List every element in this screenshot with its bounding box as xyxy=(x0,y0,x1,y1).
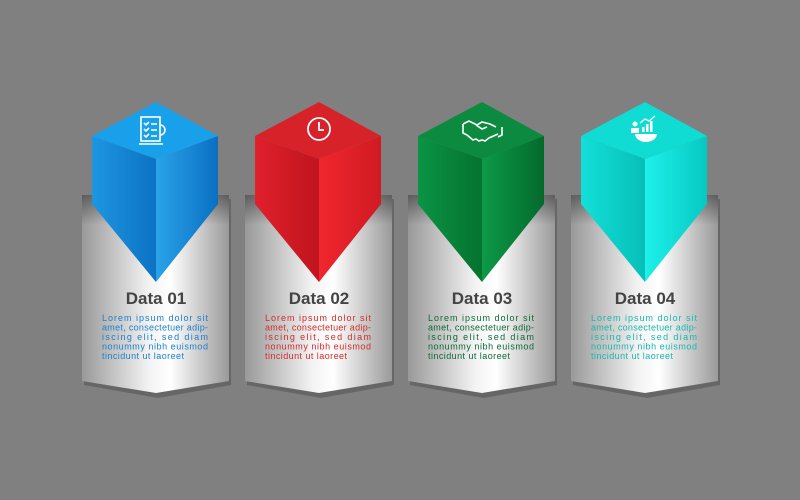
title: Data 01 xyxy=(126,289,186,308)
body text xyxy=(591,313,697,361)
body text: nonummy nibh euismod xyxy=(428,342,534,352)
body text: amet, consectetuer adip- xyxy=(428,322,534,332)
body text xyxy=(102,313,208,361)
title: Data 03 xyxy=(452,289,512,308)
hexagon prism blue xyxy=(92,102,218,282)
body text: iscing elit, sed diam xyxy=(428,332,534,342)
hexagon prism red xyxy=(255,102,381,282)
card 2: Data 02 xyxy=(245,102,394,398)
title: Data 02 xyxy=(289,289,349,308)
body text: amet, consectetuer adip- xyxy=(265,322,371,332)
body text: nonummy nibh euismod xyxy=(265,342,371,352)
body text: tincidunt ut laoreet xyxy=(265,351,347,361)
card 1: Data 01 xyxy=(82,102,231,398)
body text: tincidunt ut laoreet xyxy=(102,351,184,361)
body text: tincidunt ut laoreet xyxy=(428,351,510,361)
body text xyxy=(265,313,371,361)
body text: amet, consectetuer adip- xyxy=(102,322,208,332)
hexagon prism green xyxy=(418,102,544,282)
body text: nonummy nibh euismod xyxy=(102,342,208,352)
body text: iscing elit, sed diam xyxy=(591,332,697,342)
body text: nonummy nibh euismod xyxy=(591,342,697,352)
icon: handshake xyxy=(463,121,502,141)
card 4: Data 04 xyxy=(571,102,720,398)
card 3: Data 03 xyxy=(408,102,557,398)
body text: amet, consectetuer adip- xyxy=(591,322,697,332)
body text: iscing elit, sed diam xyxy=(102,332,208,342)
body text: Lorem ipsum dolor sit xyxy=(428,313,534,323)
body text xyxy=(428,313,534,361)
body text: Lorem ipsum dolor sit xyxy=(102,313,208,323)
hexagon prism cyan xyxy=(581,102,707,282)
icon: growth chart with gear xyxy=(631,116,657,142)
body text: Lorem ipsum dolor sit xyxy=(591,313,697,323)
icon: clock xyxy=(308,118,330,140)
body text: Lorem ipsum dolor sit xyxy=(265,313,371,323)
title: Data 04 xyxy=(615,289,676,308)
body text: tincidunt ut laoreet xyxy=(591,351,673,361)
body text: iscing elit, sed diam xyxy=(265,332,371,342)
icon: checklist xyxy=(139,117,165,144)
